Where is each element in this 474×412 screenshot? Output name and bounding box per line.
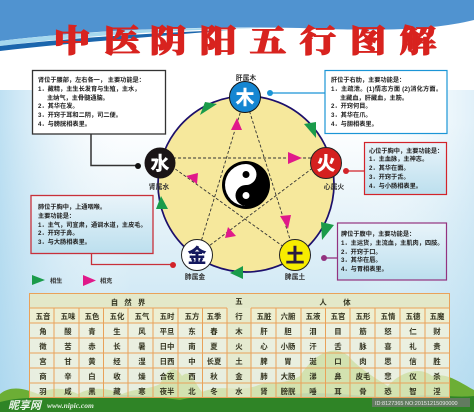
row: metal: 皮毛	[356, 372, 371, 381]
panel: heart: 2．其华在面。	[369, 164, 410, 172]
correspondence table	[30, 294, 450, 398]
row: earth: 胜	[433, 357, 441, 366]
row: fire: 脉	[359, 342, 367, 351]
row: water: 骨	[359, 387, 367, 396]
panel: heart: 4．与小肠相表里。	[369, 182, 422, 190]
panel: liver: 4．与胆相表里。	[331, 120, 378, 128]
row: fire: 小肠	[281, 342, 296, 351]
row: metal: 大肠	[281, 372, 296, 381]
row: metal: 合夜	[160, 372, 175, 381]
row: metal	[39, 372, 441, 381]
row: water: 寒	[138, 387, 146, 396]
header: five elements: 五	[235, 297, 243, 306]
row: wood: 仁	[409, 327, 417, 336]
row: wood	[39, 327, 441, 336]
panel: liver: 主藏血，肝藏血，主筋。	[340, 94, 408, 102]
row: wood: 青	[88, 327, 96, 336]
panel: kidney	[32, 70, 166, 134]
label: heart fire: 心属火	[324, 182, 344, 191]
row: metal: 肺	[260, 372, 268, 381]
row: earth	[39, 357, 441, 366]
row: metal: 杀	[433, 372, 441, 381]
panel: kidney: 1．藏精，主生长发育与生殖，主水，	[38, 85, 140, 93]
label: kidney water: 肾属水	[149, 182, 169, 191]
row: fire: 贵	[433, 342, 441, 351]
row: column names: 五形	[356, 312, 371, 321]
watermark: image id	[372, 398, 470, 407]
node: earth: 土	[285, 245, 305, 267]
restraining arrows (pink)	[186, 118, 302, 238]
row: fire: 长	[113, 342, 121, 351]
panel: liver: 2．开窍何目。	[331, 102, 372, 110]
row: column names: 五音	[36, 312, 51, 321]
row: fire: 舌	[334, 342, 342, 351]
row: wood: 风	[138, 327, 146, 336]
node: earth	[280, 240, 310, 270]
row: fire: 喜	[384, 342, 392, 351]
row: column names: 五气	[135, 312, 150, 321]
row: column names: 五德	[406, 312, 421, 321]
panel: kidney: 3．开窍于耳和二阴，司二便。	[38, 111, 122, 119]
row: water: 水	[235, 387, 243, 396]
row: water: 藏	[113, 387, 121, 396]
row: earth: 甘	[64, 357, 72, 366]
row: metal: 秋	[210, 372, 218, 381]
row: column names: 五情	[381, 312, 396, 321]
panel: heart: 1．主血脉，主神志。	[369, 155, 428, 163]
connector: liver	[267, 90, 325, 96]
node: wood	[230, 82, 260, 112]
connector: kidney	[91, 134, 141, 169]
row: fire	[39, 342, 441, 351]
node: wood: 木	[235, 86, 255, 109]
row: water: 夜半	[160, 387, 175, 396]
panel: liver: 肝位于右肋，主要功能是：	[331, 76, 405, 84]
panel: lung	[31, 196, 153, 254]
row: earth: 经	[113, 357, 121, 366]
row: metal: 仪	[409, 372, 417, 381]
row: column names: 五方	[185, 312, 199, 321]
row: wood: 生	[113, 327, 121, 336]
row: earth: 日西	[160, 357, 174, 366]
table grid	[30, 294, 450, 398]
legend: 相生	[50, 277, 62, 285]
row: column names: 五魔	[430, 312, 445, 321]
row: metal: 收	[113, 372, 121, 381]
row: column names	[36, 312, 445, 321]
legend: 相克	[100, 277, 112, 285]
row: wood: 筋	[359, 327, 367, 336]
panel: spleen	[338, 223, 446, 280]
five elements circle	[158, 96, 334, 272]
panel: lung: 主要功能是：	[38, 212, 75, 220]
panel: spleen: 3．其华在唇。	[341, 256, 382, 264]
row: earth: 长夏	[207, 357, 222, 366]
row: fire: 南	[188, 342, 196, 351]
connector: spleen	[321, 255, 337, 261]
node: fire: 火	[316, 154, 336, 175]
row: water: 膀胱	[281, 387, 296, 396]
row: fire: 汗	[309, 342, 317, 351]
row: earth: 信	[409, 357, 417, 366]
panel: spleen: 1．主运货，主流血，主肌肉，四肢。	[341, 239, 443, 247]
row: column names: 五时	[160, 312, 175, 321]
row: water: 淫	[433, 387, 441, 396]
row: water: 冬	[210, 387, 218, 396]
row: metal: 燥	[138, 372, 146, 381]
panel: kidney: 主纳气，主骨髓通脑。	[47, 94, 109, 102]
row: wood: 财	[433, 327, 441, 336]
panel: liver: 1．主疏泄。(1)情志方面 (2)消化方面。	[331, 85, 442, 93]
row: water: 咸	[64, 387, 72, 396]
node: fire	[310, 148, 342, 178]
table background	[30, 294, 450, 398]
node: water: 水	[150, 153, 170, 175]
row: earth: 口	[334, 357, 342, 366]
row: water: 耳	[334, 387, 342, 396]
row: column names: 五脏	[257, 312, 272, 321]
row: water: 唾	[309, 387, 317, 396]
yin yang symbol	[222, 161, 270, 209]
panel: spleen: 4．与胃相表里。	[341, 265, 388, 273]
panel: lung: 2．开窍于鼻。	[38, 229, 79, 237]
row: earth: 脾	[260, 357, 268, 366]
row: column names: 六腑	[281, 312, 296, 321]
panel: kidney: 肾位于腰部，左右各一， 主要功能是：	[38, 76, 145, 84]
row: column names: 五色	[85, 312, 100, 321]
row: earth: 涎	[309, 357, 317, 366]
star dashed lines	[160, 97, 326, 255]
connector: heart	[343, 168, 364, 174]
row: water	[39, 387, 441, 396]
row: column names: 五化	[110, 312, 125, 321]
row: metal: 涕	[309, 372, 317, 381]
generating arrows (green)	[156, 102, 334, 279]
row: fire: 日中	[160, 342, 174, 351]
panel: heart: 3．开窍于舌。	[369, 173, 410, 181]
watermark: image id: ID:8127365 NO:20151215090000	[375, 401, 458, 407]
panel: heart: 心位于胸中，主要功能是：	[369, 147, 443, 155]
row: earth: 土	[235, 357, 243, 366]
watermark: site: www.nipic.com	[47, 401, 94, 410]
row: wood: 东	[188, 327, 196, 336]
header: nature: 自 然 界	[111, 298, 146, 307]
row: column names: 五液	[306, 312, 321, 321]
row: water: 北	[188, 387, 196, 396]
row: metal: 商	[39, 372, 47, 381]
row: metal: 金	[235, 372, 243, 381]
row: wood: 泪	[309, 327, 317, 336]
row: earth: 宫	[39, 357, 47, 366]
row: water: 智	[409, 387, 417, 396]
row: water: 恐	[384, 387, 392, 396]
row: wood: 酸	[64, 327, 72, 336]
row: column names: 五味	[61, 312, 76, 321]
watermark: site	[8, 399, 94, 412]
node: metal: 金	[187, 244, 207, 267]
row: fire: 心	[260, 342, 268, 351]
row: wood: 木	[235, 327, 243, 336]
row: wood: 肝	[260, 327, 268, 336]
label: liver wood: 肝属木	[236, 73, 256, 82]
panel: kidney: 4．与膀胱相表里。	[38, 120, 91, 128]
legend	[32, 275, 112, 286]
row: column names: 五官	[331, 312, 345, 321]
node: water	[144, 148, 176, 178]
row: water: 羽	[39, 387, 47, 396]
header: human body: 人 体	[319, 298, 351, 307]
watermark: site: 昵享网	[8, 399, 43, 412]
row: earth: 黄	[88, 357, 96, 366]
label: spleen earth: 脾属土	[285, 272, 305, 281]
panel: liver: 3．其华在爪。	[331, 111, 372, 119]
panel: lung: 3．与大肠相表里。	[38, 238, 91, 246]
row: wood: 胆	[284, 327, 292, 336]
row: earth: 思	[384, 357, 392, 366]
row: fire: 夏	[210, 342, 218, 351]
row: column names: 五季	[207, 312, 222, 321]
row: fire: 苦	[64, 342, 72, 351]
row: column names: 行	[235, 312, 243, 321]
row: earth: 肉	[359, 357, 367, 366]
row: water: 肾	[260, 387, 268, 396]
row: metal: 白	[88, 372, 96, 381]
row: water: 黑	[88, 387, 96, 396]
row: fire: 徵	[39, 342, 47, 351]
row: fire: 赤	[88, 342, 96, 351]
panel: spleen: 2．开窍于口。	[341, 248, 382, 256]
row: wood: 目	[334, 327, 342, 336]
row: wood: 平旦	[160, 327, 174, 336]
row: fire: 暑	[138, 342, 146, 351]
panel: lung: 肺位于胸中，上通咽喉。	[38, 203, 106, 211]
row: metal: 悲	[384, 372, 392, 381]
row: earth: 中	[188, 357, 196, 366]
panel: liver	[325, 70, 447, 134]
trees	[0, 351, 474, 412]
panel: kidney: 2．其华在发。	[38, 102, 79, 110]
row: fire: 礼	[409, 342, 417, 351]
row: earth: 胃	[284, 357, 292, 366]
row: wood: 春	[210, 327, 218, 336]
row: metal: 西	[188, 372, 196, 381]
row: metal: 鼻	[334, 372, 342, 381]
title: 中医阴阳五行图解	[54, 25, 436, 59]
row: earth: 湿	[138, 357, 146, 366]
row: wood: 角	[39, 327, 47, 336]
node: metal	[182, 240, 212, 270]
panel: heart	[364, 142, 446, 194]
panel: lung: 1．主气，司宣肃，通调水道，主皮毛。	[38, 221, 147, 229]
row: fire: 火	[235, 342, 243, 351]
row: metal: 辛	[64, 372, 72, 381]
label: lung metal: 肺属金	[185, 272, 205, 281]
row: wood: 怒	[384, 327, 392, 336]
panel: spleen: 脾位于腹中，主要功能是：	[341, 230, 415, 238]
connector: lung	[92, 253, 176, 268]
